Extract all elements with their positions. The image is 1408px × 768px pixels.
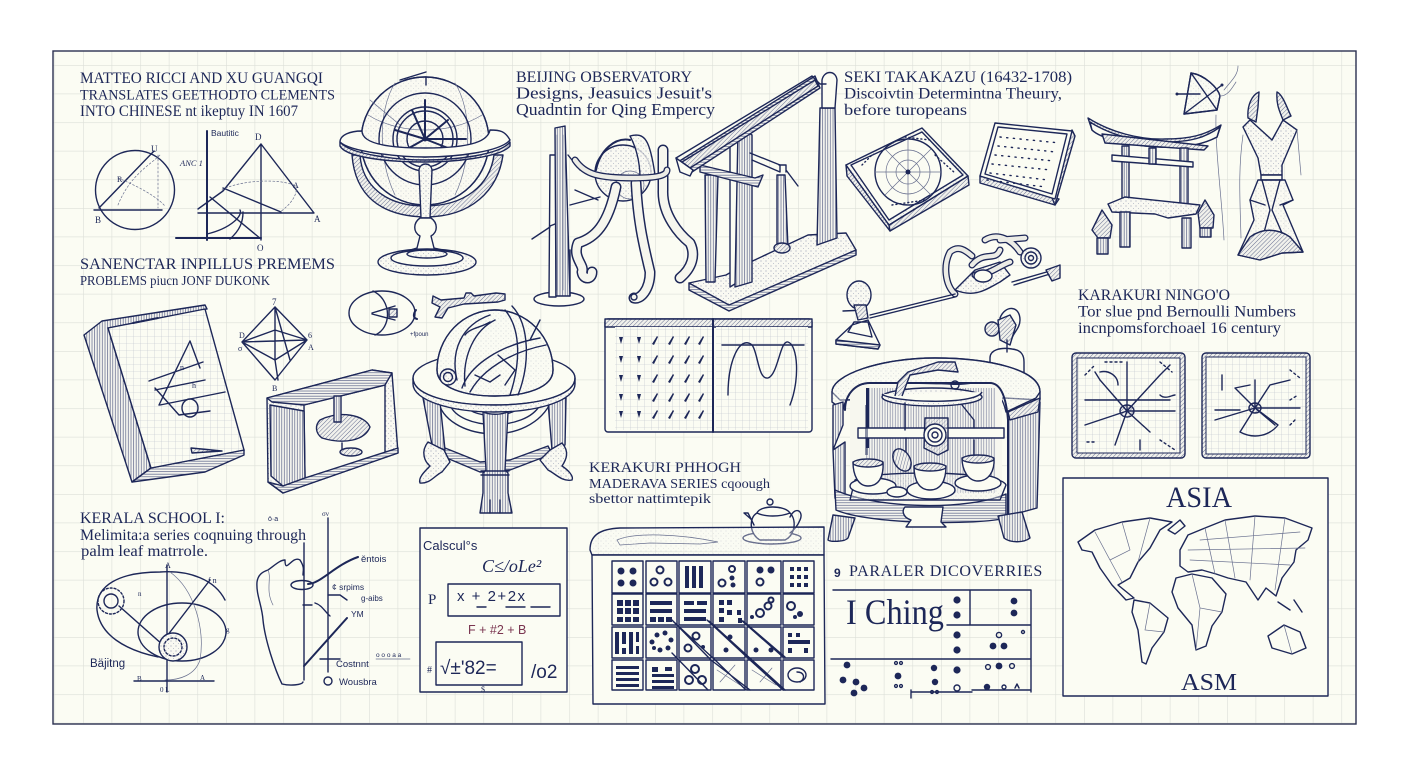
formula box: calculus: Calscul°s bbox=[423, 538, 478, 553]
icon: quadrant on beam and base bbox=[676, 72, 856, 311]
icon: divination tablet bbox=[846, 128, 969, 231]
diagram: planetary orbits: Bäjitng bbox=[90, 658, 125, 670]
panel: Asia world map bbox=[1063, 478, 1328, 696]
icon: karakuri tea automaton bbox=[828, 308, 1040, 542]
heading: Beijing Observatory: Quadntin for Qing Empercy bbox=[516, 100, 716, 119]
heading: Seki Takakazu: Discoivtin Determintna Theuıry, bbox=[844, 86, 1062, 102]
icon: teapot on saucer bbox=[743, 499, 801, 544]
formula box: calculus bbox=[420, 528, 567, 694]
diagram: Euclid triangle construction bbox=[176, 128, 321, 253]
diagram: Euclid triangle construction: Bautitic bbox=[211, 128, 240, 138]
diagram: octahedron: 7 bbox=[272, 297, 277, 307]
text block: Matteo Ricci and Xu Guangqi: TRANSLATES GEETHODTO CLEMENTS bbox=[80, 88, 335, 104]
diagram: circle geometry: R bbox=[117, 175, 123, 184]
formula box: calculus: C≤/oLe² bbox=[482, 556, 542, 576]
formula box: calculus: F + #2 + B bbox=[468, 623, 526, 637]
map: North America bbox=[1078, 518, 1172, 600]
diagram: planetary orbits: 0 L bbox=[160, 686, 170, 694]
map: Australia and islands bbox=[1168, 520, 1306, 654]
heading: Sanenctar Inpillus Premems: SANENCTAR INPILLUS PREMEMS bbox=[80, 256, 335, 273]
formula box: calculus: √±'82= bbox=[440, 658, 497, 679]
diagram: palm leaf manuscript with labels: ¢ srpims bbox=[332, 582, 364, 592]
heading: Karakuri Ningyo: incnpomsforchoael 16 century bbox=[1078, 320, 1281, 337]
heading: Kerakuri Phhogh bbox=[589, 460, 770, 507]
heading: Sanenctar Inpillus Premems: PROBLEMS piucn JONF DUKONK bbox=[80, 274, 270, 289]
heading: Parallel Discoveries: PARALER DICOVERRIES bbox=[849, 563, 1043, 580]
text block: Matteo Ricci and Xu Guangqi: INTO CHINESE nt ikeptuy IN 1607 bbox=[80, 103, 298, 120]
diagram: palm leaf manuscript with labels: g-aibs bbox=[361, 594, 383, 603]
heading: Seki Takakazu: SEKI TAKAKAZU (16432-1708) bbox=[844, 69, 1072, 86]
formula box: calculus: $ bbox=[481, 685, 485, 694]
icon: dotted counting tablet bbox=[980, 123, 1075, 205]
heading: Kerakuri Phhogh: sbettor nattimtepik bbox=[589, 492, 711, 507]
panel: I Ching hexagram board bbox=[590, 527, 825, 704]
diagram: Euclid triangle construction: ANC 1 bbox=[179, 158, 203, 168]
icon: armillary globe on stand bbox=[340, 72, 510, 275]
diagram: circle geometry bbox=[94, 144, 174, 230]
diagram: palm leaf manuscript with labels: Costnnt bbox=[336, 659, 369, 670]
icon: book with geometry page bbox=[84, 305, 244, 482]
map: Africa bbox=[1172, 574, 1226, 650]
diagram: octahedron: D bbox=[239, 331, 245, 340]
heading: Karakuri Ningyo: Tor slue pnd Bernoulli Numbers bbox=[1078, 304, 1296, 320]
diagram: palm leaf manuscript with labels bbox=[257, 510, 410, 688]
diagram: planetary orbits bbox=[90, 561, 230, 694]
diagram: planetary orbits: g bbox=[226, 626, 230, 634]
icon: small ellipse instrument bbox=[349, 291, 429, 338]
icon: book with geometry page: n bbox=[180, 363, 184, 372]
diagram: palm leaf manuscript with labels: σν bbox=[322, 510, 329, 518]
hexagram grid row 2 bbox=[612, 594, 814, 625]
heading: Seki Takakazu bbox=[844, 69, 1072, 119]
diagram: palm leaf manuscript with labels: Wousbra bbox=[339, 677, 378, 688]
text block: Kerala School: Melimita:a series coqnuing through bbox=[80, 527, 306, 544]
icon: dancing figure bbox=[1238, 92, 1303, 260]
diagram: planetary orbits: A bbox=[200, 674, 205, 682]
diagram: octahedron: A bbox=[308, 343, 314, 352]
map: borders bbox=[1095, 516, 1305, 654]
diagram: Euclid triangle construction: D bbox=[255, 132, 262, 142]
diagram: octahedron: σ bbox=[238, 344, 243, 353]
text block: Matteo Ricci and Xu Guangqi: MATTEO RICCI AND XU GUANGQI bbox=[80, 70, 323, 87]
diagram: palm leaf manuscript with labels: ö·a bbox=[268, 516, 278, 523]
diagram: Euclid triangle construction: A bbox=[314, 214, 321, 224]
diagram: planetary orbits: n bbox=[138, 590, 142, 598]
formula box: calculus: P bbox=[428, 592, 436, 608]
formula box: calculus: x + 2+2x bbox=[457, 588, 527, 605]
heading: Seki Takakazu: before turopeans bbox=[844, 102, 967, 119]
icon: framed instrument box bbox=[267, 370, 398, 493]
diagram: Euclid triangle construction: O bbox=[257, 243, 264, 253]
heading: Karakuri Ningyo bbox=[1078, 287, 1296, 337]
heading: Kerakuri Phhogh: MADERAVA SERIES cqoough bbox=[589, 477, 770, 492]
heading: Sanenctar Inpillus Premems bbox=[80, 256, 335, 289]
text block: Matteo Ricci and Xu Guangqi bbox=[80, 70, 335, 120]
panel: Asia world map: ASM bbox=[1181, 670, 1237, 696]
diagram: octahedron: 6 bbox=[308, 331, 312, 340]
hexagram grid row 1 bbox=[612, 561, 814, 593]
icon: book with geometry page: h bbox=[192, 381, 196, 390]
diagram: kite-shaped geometry bbox=[1176, 66, 1238, 240]
heading: Beijing Observatory: BEIJING OBSERVATORY bbox=[516, 69, 692, 86]
icon: small ellipse instrument: +fpoun bbox=[410, 332, 429, 338]
text block: Kerala School: palm leaf matrrole. bbox=[81, 543, 208, 560]
formula box: calculus: /o2 bbox=[531, 662, 557, 683]
panel: Asia world map: ASIA bbox=[1166, 481, 1232, 514]
hexagram grid row 4 bbox=[612, 660, 814, 690]
icon: wrench tool bbox=[432, 293, 505, 318]
diagram: planetary orbits: A bbox=[165, 561, 171, 570]
panel: I Ching dot table: I Ching bbox=[846, 592, 944, 632]
diagram: planetary orbits: B bbox=[137, 675, 142, 683]
diagram: planetary orbits: f n bbox=[208, 576, 217, 585]
diagram: palm leaf manuscript with labels: ěntois bbox=[361, 554, 387, 565]
heading: Beijing Observatory bbox=[516, 69, 716, 119]
icon: gear mechanism with rod and handle bbox=[836, 237, 1060, 349]
table of symbols and curve chart bbox=[605, 319, 812, 432]
map: South America bbox=[1132, 600, 1168, 664]
diagram: octahedron: B bbox=[272, 384, 277, 393]
hexagram grid row 3 bbox=[612, 627, 814, 658]
icon: torii gate on platform bbox=[1088, 118, 1221, 254]
heading: Kerakuri Phhogh: KERAKURI PHHOGH bbox=[589, 460, 741, 476]
diagram: palm leaf manuscript with labels: YM bbox=[351, 609, 364, 619]
chart: radial plate one bbox=[1072, 353, 1185, 458]
panel: I Ching dot table bbox=[831, 590, 1031, 698]
icon: graduated post with scrolled globe stand bbox=[532, 126, 693, 306]
diagram: circle geometry: U bbox=[151, 144, 158, 154]
heading: Parallel Discoveries: 9 bbox=[834, 566, 841, 580]
diagram: circle geometry: B bbox=[95, 215, 101, 225]
chart: radial plate two bbox=[1202, 353, 1310, 458]
map: Eurasia bbox=[1180, 516, 1312, 600]
text block: Kerala School: KERALA SCHOOL I: bbox=[80, 510, 225, 527]
icon: globe on carved stand bbox=[413, 306, 575, 513]
text block: Kerala School bbox=[80, 510, 306, 560]
heading: Karakuri Ningyo: KARAKURI NINGO'O bbox=[1078, 287, 1230, 304]
formula box: calculus: # bbox=[427, 665, 432, 676]
diagram: palm leaf manuscript with labels: o o o a a bbox=[376, 652, 402, 659]
diagram: octahedron bbox=[238, 297, 314, 393]
heading: Beijing Observatory: Designs, Jeasuics Jesuit's bbox=[516, 84, 712, 102]
diagram: Euclid triangle construction: A bbox=[293, 181, 299, 190]
